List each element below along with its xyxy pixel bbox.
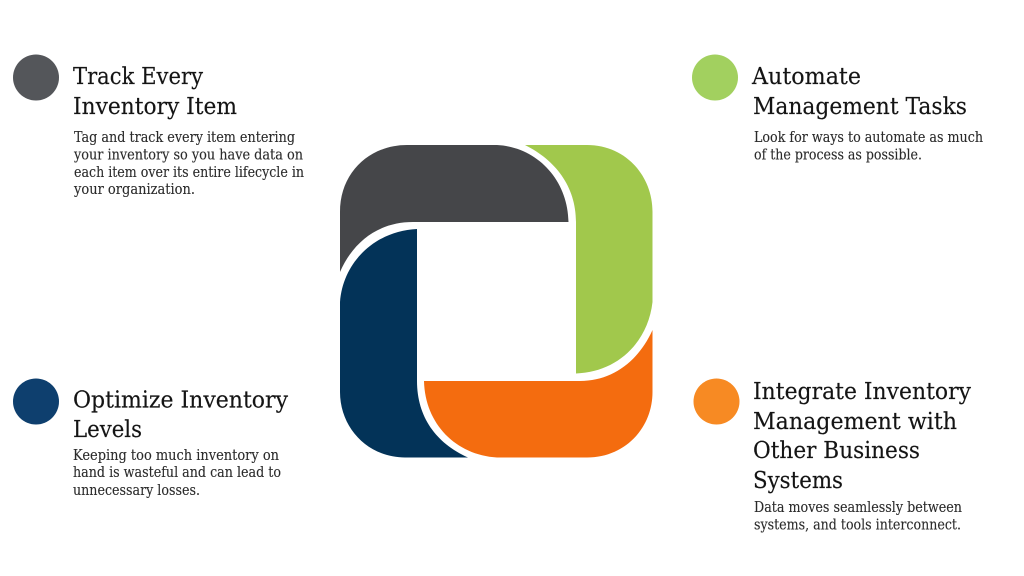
heading (73, 388, 288, 443)
item: Optimize Inventory Levels (13, 378, 288, 499)
heading (73, 64, 237, 120)
segment: orange (424, 330, 652, 458)
item: Automate Management Tasks (692, 54, 983, 164)
heading: Systems (753, 468, 843, 494)
body text (73, 130, 304, 198)
heading: Other Business (753, 438, 920, 464)
icon: orange circle (694, 378, 740, 424)
segment: dark grey (340, 145, 568, 272)
segment: navy (340, 229, 468, 458)
heading: Management with (753, 409, 957, 435)
body text: Look for ways to automate as much (754, 130, 983, 146)
heading (751, 64, 967, 120)
body text (754, 500, 962, 534)
body text: unnecessary losses. (73, 483, 200, 499)
body text: each item over its entire lifecycle in (74, 165, 304, 181)
item: Integrate Inventory Management with Other Business Systems (694, 378, 971, 534)
segment: green (525, 145, 652, 374)
body text: your organization. (73, 182, 195, 198)
body text: Keeping too much inventory on (73, 448, 279, 464)
heading: Automate (751, 64, 861, 90)
heading: Optimize Inventory (73, 388, 288, 414)
heading: Inventory Item (73, 94, 237, 120)
body text (754, 130, 983, 164)
body text: hand is wasteful and can lead to (73, 465, 281, 481)
icon: navy circle (13, 378, 59, 424)
central four-segment rounded square (340, 145, 652, 458)
icon: green circle (692, 54, 738, 100)
body text (73, 448, 281, 499)
heading: Levels (73, 417, 142, 443)
heading: Integrate Inventory (753, 379, 971, 405)
heading: Management Tasks (753, 94, 967, 120)
body text: Data moves seamlessly between (754, 500, 962, 516)
icon: dark grey circle (13, 54, 59, 100)
body text: your inventory so you have data on (73, 148, 303, 164)
body text: of the process as possible. (754, 148, 922, 164)
heading: Track Every (73, 64, 203, 90)
item: Track Every Inventory Item (13, 54, 304, 198)
body text: Tag and track every item entering (74, 130, 295, 146)
heading (753, 379, 971, 494)
body text: systems, and tools interconnect. (754, 518, 961, 534)
